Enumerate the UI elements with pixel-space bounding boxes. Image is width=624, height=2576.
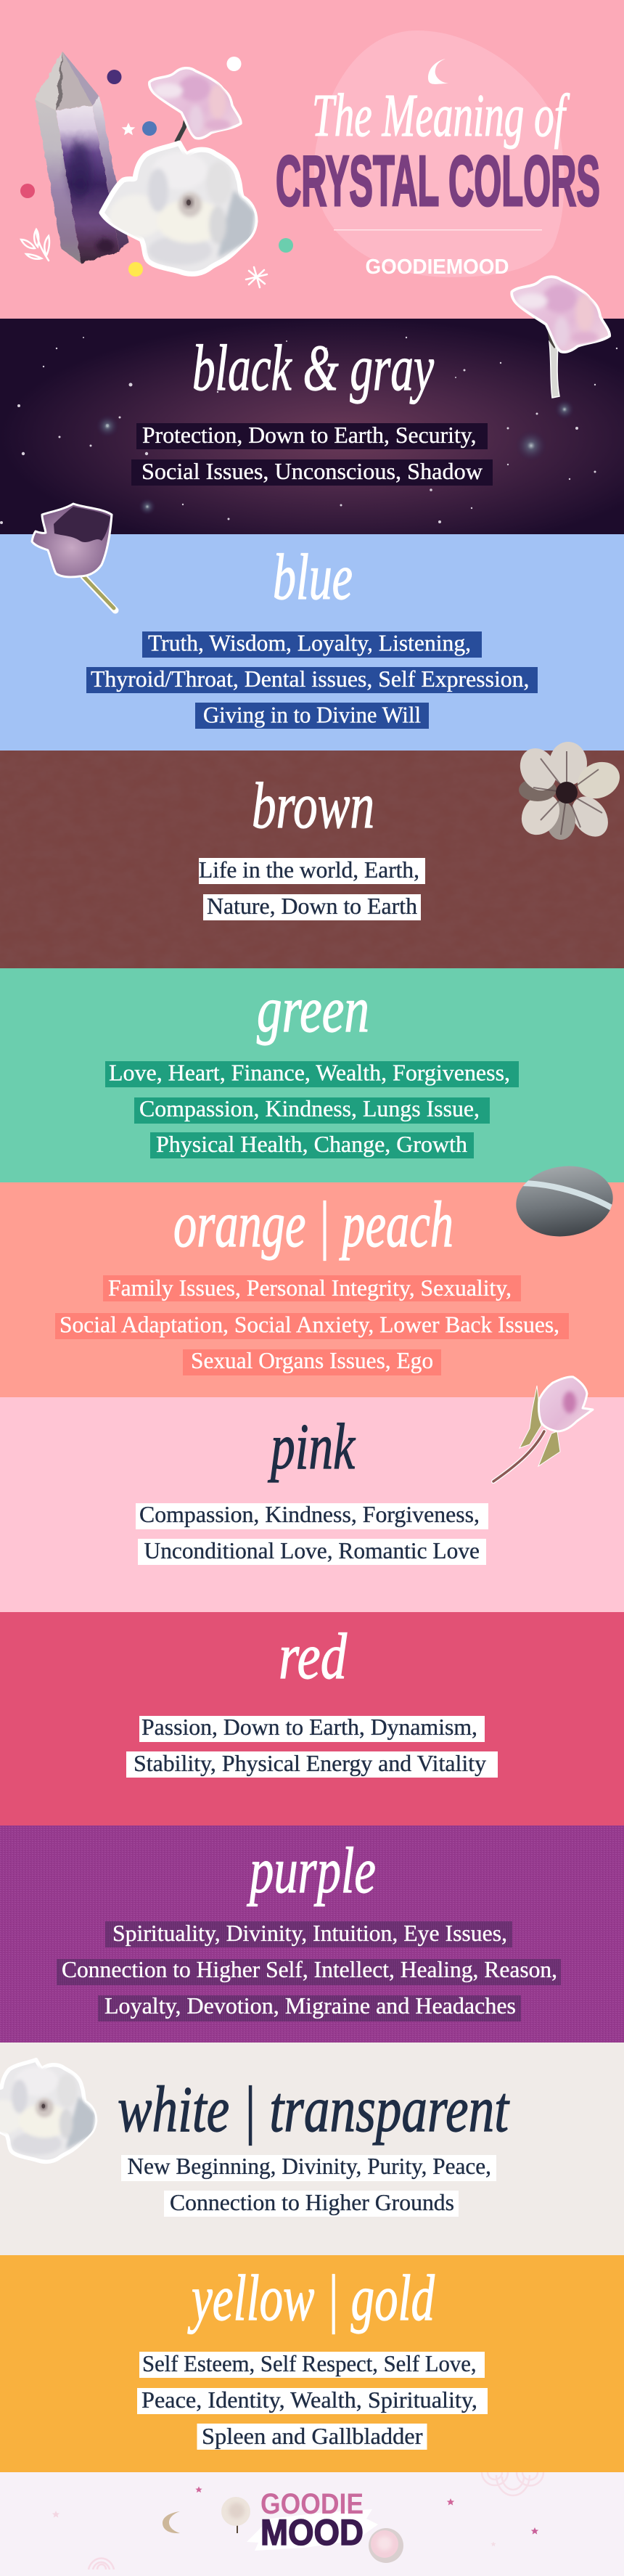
icon: peony [369, 2528, 403, 2563]
keywords: green: Love, Heart, Finance, Wealth, Forgiveness, [109, 1060, 510, 1086]
keywords: pink: Compassion, Kindness, Forgiveness, [139, 1501, 480, 1527]
keywords: green: Physical Health, Change, Growth [156, 1131, 467, 1157]
decoration: rose on black panel [512, 277, 609, 398]
keywords: purple [57, 1920, 561, 2021]
panel: purple [0, 1825, 624, 2043]
heading: blue: blue [273, 541, 353, 613]
keywords: orange and peach: Family Issues, Personal Integrity, Sexuality, [108, 1275, 512, 1301]
keywords: red: Stability, Physical Energy and Vitality [134, 1750, 486, 1776]
divider line [334, 229, 542, 231]
heading: white and transparent: white | transparent [118, 2074, 510, 2146]
panel: yellow and gold [0, 2255, 624, 2472]
keywords: pink: Unconditional Love, Romantic Love [144, 1537, 480, 1563]
heading: purple: purple [247, 1835, 376, 1907]
star glows [96, 399, 575, 515]
brand: goodiemood: GOODIEMOOD [366, 255, 509, 279]
decoration: cloud arcs [482, 2472, 543, 2495]
heading: black and gray: black & gray [192, 332, 434, 404]
decoration: anemone flower [514, 742, 624, 843]
heading: orange and peach: orange | peach [173, 1189, 453, 1261]
icon: moon [163, 2511, 180, 2533]
logo: goodie mood: MOOD [260, 2512, 364, 2553]
heading: red: red [279, 1621, 348, 1693]
icon: small rose [221, 2497, 250, 2533]
panel: pink [0, 1397, 624, 1612]
keywords: yellow and gold [137, 2350, 488, 2450]
keywords: brown [199, 856, 425, 920]
keywords: purple: Loyalty, Devotion, Migraine and Headaches [104, 1992, 516, 2019]
keywords: white and transparent [121, 2153, 496, 2217]
panel: white and transparent [0, 2043, 624, 2255]
keywords: yellow and gold: Self Esteem, Self Respect, Self Love, [142, 2350, 476, 2376]
heading: green: green [257, 974, 369, 1046]
illustration: stem of pink rose [176, 114, 187, 142]
panel: orange and peach [0, 1182, 624, 1397]
illustration: pink rose [149, 68, 241, 139]
heading: yellow and gold: yellow | gold [187, 2262, 435, 2334]
background blob [314, 30, 565, 277]
keywords: green [105, 1060, 519, 1158]
nebula [0, 319, 624, 534]
texture [0, 751, 624, 968]
decoration: rose bud [493, 1377, 593, 1481]
icon: asterisk [246, 267, 267, 287]
keywords: orange and peach: Sexual Organs Issues, Ego [191, 1347, 433, 1373]
keywords: white and transparent: Connection to Higher Grounds [170, 2189, 454, 2215]
panel: footer [0, 2472, 624, 2576]
keywords: brown: Life in the world, Earth, [199, 856, 419, 883]
heading: pink: pink [268, 1411, 356, 1483]
keywords: black and gray: Social Issues, Unconscious, Shadow [141, 458, 483, 484]
keywords: red [126, 1714, 498, 1778]
keywords: brown: Nature, Down to Earth [207, 893, 417, 919]
keywords: red: Passion, Down to Earth, Dynamism, [141, 1714, 477, 1740]
decoration: white rose on white panel [0, 2060, 96, 2162]
keywords: orange and peach: Social Adaptation, Social Anxiety, Lower Back Issues, [59, 1311, 559, 1337]
logo: goodie mood [260, 2488, 364, 2553]
keywords: purple: Spirituality, Divinity, Intuition, Eye Issues, [112, 1920, 507, 1946]
illustration: amethyst crystal [35, 52, 128, 263]
keywords: orange and peach [55, 1275, 569, 1375]
keywords: blue: Truth, Wisdom, Loyalty, Listening, [148, 630, 471, 656]
keywords: pink [136, 1501, 488, 1565]
dots [20, 57, 293, 277]
panel: black and gray [0, 319, 624, 534]
logo: goodie mood: GOODIE [260, 2488, 364, 2520]
panel: red [0, 1612, 624, 1825]
decoration: rainbow arcs [89, 2559, 114, 2569]
illustration: white rose [102, 143, 255, 274]
keywords: black and gray [131, 422, 493, 486]
keywords: green: Compassion, Kindness, Lungs Issue, [139, 1095, 480, 1121]
decoration: stars [52, 2487, 538, 2546]
panel: green [0, 968, 624, 1182]
starfield [0, 337, 617, 524]
icon: moon [428, 59, 448, 84]
panel: header [0, 0, 624, 319]
icon: sprig [21, 229, 49, 261]
keywords: blue: Thyroid/Throat, Dental issues, Self Expression, [91, 666, 530, 692]
keywords: yellow and gold: Peace, Identity, Wealth, Spirituality, [141, 2387, 477, 2413]
keywords: blue: Giving in to Divine Will [203, 701, 421, 727]
decoration: gray stone [516, 1166, 613, 1237]
decoration: tulip [32, 504, 115, 610]
keywords: black and gray: Protection, Down to Earth, Security, [142, 422, 476, 448]
keywords: yellow and gold: Spleen and Gallbladder [202, 2423, 423, 2449]
heading: brown: brown [252, 770, 374, 842]
logo splash [247, 2509, 378, 2551]
keywords: purple: Connection to Higher Self, Intellect, Healing, Reason, [62, 1956, 557, 1982]
panel: blue [0, 534, 624, 751]
panel: brown [0, 751, 624, 968]
keywords: blue [86, 630, 538, 729]
keywords: white and transparent: New Beginning, Divinity, Purity, Peace, [128, 2153, 491, 2179]
icon: small star [122, 123, 135, 135]
